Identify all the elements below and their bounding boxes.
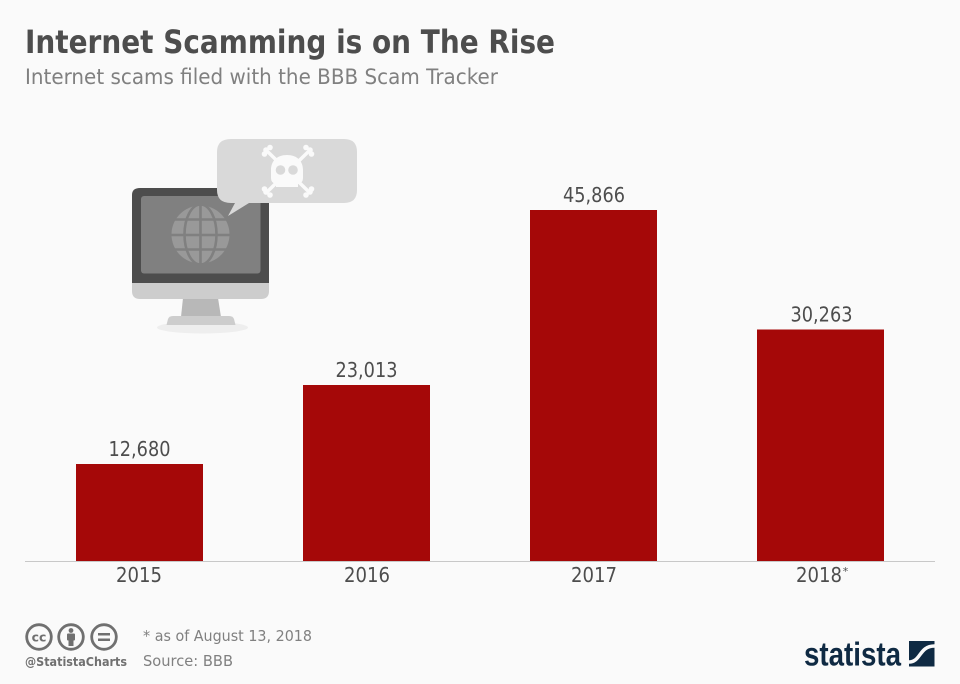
icon: speech bubble xyxy=(217,139,357,216)
icon: skull and crossbones xyxy=(262,145,314,198)
baseline xyxy=(25,561,935,562)
value labels: 45,866 xyxy=(563,183,625,207)
icon: monitor shadow xyxy=(157,322,248,334)
icon: globe xyxy=(171,204,230,265)
icon: monitor frame xyxy=(132,188,269,283)
value labels xyxy=(108,183,852,461)
bar: 2018 xyxy=(757,330,884,561)
bar: 2016 xyxy=(303,385,430,561)
icon: monitor stand xyxy=(181,298,221,317)
source: Source: BBB xyxy=(143,652,233,670)
logo wordmark: statista xyxy=(804,636,901,674)
icon: attribution xyxy=(59,625,83,649)
value labels: 23,013 xyxy=(336,358,398,382)
subtitle: Internet scams filed with the BBB Scam Tracker xyxy=(25,65,498,90)
bar: 2015 xyxy=(76,464,203,561)
value labels: 12,680 xyxy=(108,437,170,461)
icon: monitor screen xyxy=(141,196,260,274)
icon: cc: cc xyxy=(32,630,46,644)
year labels: 2018 xyxy=(796,563,842,587)
bar chart xyxy=(25,183,935,587)
illustration: computer with scam speech bubble xyxy=(132,139,357,334)
year labels: * xyxy=(843,565,849,578)
year labels: 2017 xyxy=(571,563,617,587)
icon: monitor chin xyxy=(132,283,269,299)
license icons xyxy=(27,625,116,649)
year labels: 2015 xyxy=(116,563,162,587)
year labels xyxy=(116,563,849,587)
bar: 2017 xyxy=(530,210,657,561)
statista logo xyxy=(804,636,934,674)
icon: monitor base xyxy=(166,316,236,325)
handle: @StatistaCharts xyxy=(25,655,127,669)
logo mark xyxy=(909,641,934,666)
year labels: 2016 xyxy=(344,563,390,587)
title: Internet Scamming is on The Rise xyxy=(25,23,555,61)
icon: no derivatives xyxy=(92,625,116,649)
footnote: * as of August 13, 2018 xyxy=(143,627,312,645)
value labels: 30,263 xyxy=(790,302,852,326)
